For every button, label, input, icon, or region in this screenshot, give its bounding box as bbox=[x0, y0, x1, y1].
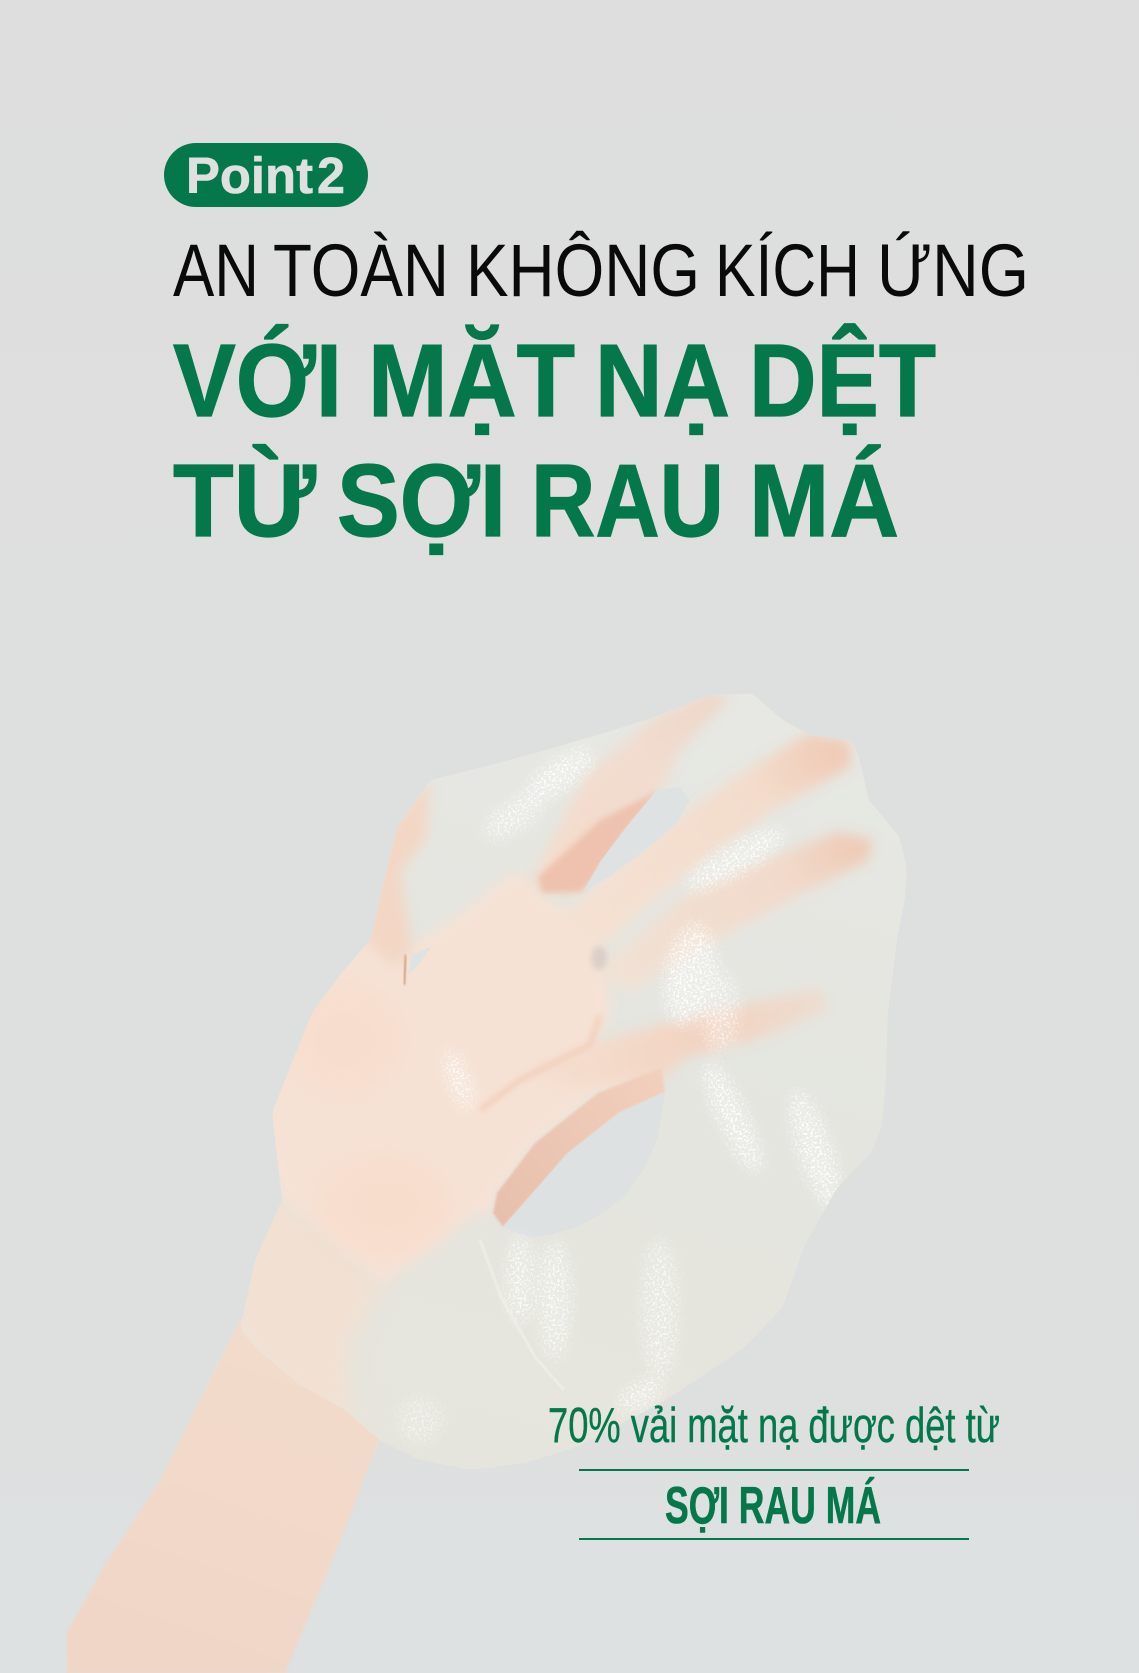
heading line 3: MÁ bbox=[749, 443, 899, 558]
heading line 3 bbox=[173, 443, 899, 558]
heading line 1: ỨNG bbox=[877, 229, 1029, 312]
heading line 1: KHÔNG bbox=[466, 229, 700, 312]
wrist under mask bbox=[242, 1202, 373, 1408]
palm warm shading bbox=[285, 985, 405, 1095]
arm bbox=[67, 1280, 420, 1673]
finger 4 bbox=[572, 989, 824, 1084]
finger 2 bbox=[556, 733, 850, 945]
heading line 2: MẶT bbox=[368, 323, 575, 438]
palm crease bbox=[404, 955, 406, 985]
heading line 2: NẠ bbox=[595, 323, 730, 438]
caption rule top bbox=[579, 1469, 969, 1471]
mask fold line bbox=[480, 1240, 564, 1390]
badge: Point 2: 2 bbox=[317, 147, 345, 204]
badge: Point 2: Point bbox=[186, 147, 313, 204]
eye opening bbox=[583, 787, 690, 892]
lower finger band bbox=[493, 1068, 665, 1227]
heading line 3: SỢI bbox=[337, 443, 506, 558]
palm heel shading bbox=[348, 1184, 418, 1226]
finger 1 bbox=[530, 692, 730, 895]
knuckle shadow bbox=[591, 946, 607, 970]
caption highlight: SỢI RAU MÁ bbox=[665, 1477, 881, 1535]
heading line 1: KÍCH bbox=[715, 229, 860, 312]
photo: hand holding sheet mask bbox=[67, 680, 920, 1673]
heading line 1 bbox=[173, 229, 1029, 312]
badge: Point 2 bbox=[164, 143, 368, 207]
thumb bbox=[365, 780, 430, 968]
heading line 1: AN bbox=[173, 229, 259, 312]
finger 3 bbox=[597, 832, 872, 992]
thumb web opening bbox=[408, 946, 432, 975]
heading line 2: VỚI bbox=[173, 323, 342, 438]
caption bbox=[548, 1399, 1000, 1540]
heading line 1: TOÀN bbox=[273, 229, 449, 312]
mouth opening bbox=[503, 1092, 665, 1237]
sheet mask with hand underneath bbox=[242, 694, 906, 1451]
mask base bbox=[242, 694, 906, 1451]
heading line 2 bbox=[173, 323, 936, 438]
knuckle fold lines bbox=[480, 1015, 600, 1110]
heading line 3: TỪ bbox=[173, 443, 317, 558]
heading line 3: RAU bbox=[531, 443, 724, 558]
finger 1 shadow side bbox=[538, 790, 659, 893]
heading line 2: DỆT bbox=[749, 323, 936, 438]
palm bbox=[272, 874, 610, 1280]
mask sparkles bbox=[398, 741, 849, 1442]
caption rule bottom bbox=[579, 1538, 969, 1540]
